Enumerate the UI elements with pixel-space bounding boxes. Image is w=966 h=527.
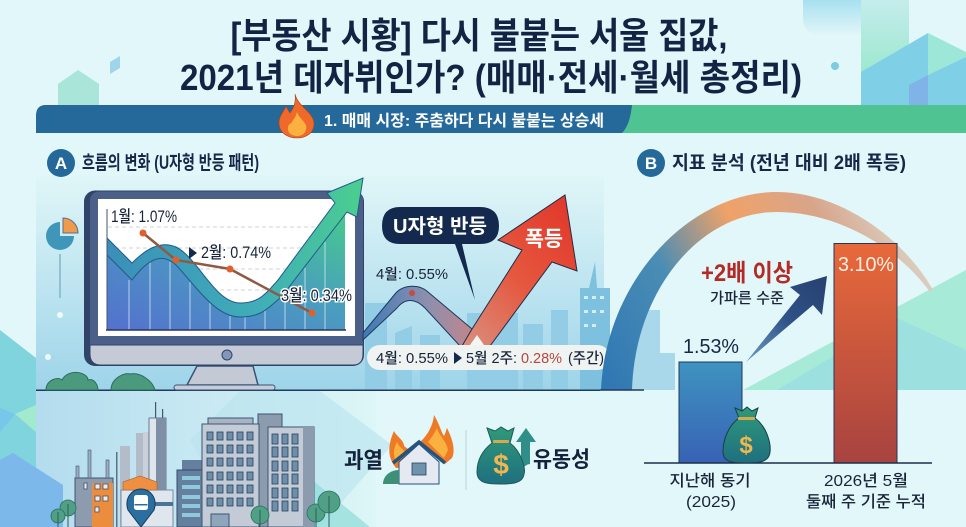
arrow: growth (746, 276, 827, 362)
section banner: 1. 매매 시장: 주춤하다 다시 불붙는 상승세 (324, 112, 604, 130)
middle band scenery (0, 175, 966, 391)
lower left background (0, 391, 36, 527)
title: 2021년 데자뷔인가? (매매·전세·월세 총정리) (180, 57, 802, 98)
callout: double: +2배 이상 (701, 260, 793, 287)
section banner (36, 94, 966, 138)
label and icon: overheating: 과열 (344, 448, 383, 473)
bar: 2025 (679, 362, 742, 463)
weekly pill: 5월 2주: (466, 350, 517, 367)
icon: money bag on bar (723, 407, 770, 463)
label: April: 4월: 0.55% (376, 266, 448, 283)
label: January: 1월: 1.07% (111, 207, 177, 226)
heading B: B (645, 154, 657, 173)
heading B: 지표 분석 (전년 대비 2배 폭등) (672, 152, 906, 174)
city illustration (51, 402, 340, 527)
value: 1.53%: 1.53% (683, 336, 739, 358)
label: March: 3월: 0.34% (281, 286, 352, 305)
weekly pill (367, 335, 610, 370)
trees (46, 372, 155, 390)
heading A: 흐름의 변화 (U자형 반등 패턴) (82, 152, 259, 174)
label: last year: (2025) (686, 494, 736, 511)
icon: money bag with up arrow: $ (493, 449, 509, 480)
label: this year: 둘째 주 기준 누적 (806, 493, 926, 511)
icon: fire (279, 94, 314, 138)
heading A: A (55, 154, 67, 173)
chart: bar comparison (600, 244, 932, 511)
label: this year (806, 472, 926, 511)
title: [부동산 시황] 다시 불붙는 서울 집값, (230, 15, 728, 56)
icon: pie chart (45, 218, 78, 360)
label: last year (670, 472, 750, 511)
value: 3.10%: 3.10% (838, 254, 894, 276)
monitor (84, 178, 364, 390)
heading A (47, 149, 259, 177)
label: surge: 폭등 (525, 228, 563, 251)
label: last year: 지난해 동기 (670, 472, 750, 490)
weekly pill: 0.28% (521, 350, 562, 367)
screen (98, 199, 355, 336)
weekly pill: (주간) (568, 350, 604, 367)
weekly pill: 4월: 0.55% (376, 350, 448, 367)
title (180, 15, 802, 98)
icon: money bag on bar: $ (739, 432, 753, 459)
arch (601, 192, 933, 390)
label: February: 2월: 0.74% (201, 243, 271, 262)
arrow: surge (462, 195, 577, 346)
bar: 2026 (834, 244, 897, 463)
heading B (637, 149, 906, 177)
chart: rebound wave (363, 286, 490, 346)
label and icon: overheating (344, 415, 454, 484)
icon: money bag with up arrow (466, 427, 590, 490)
label: this year: 2026년 5월 (824, 472, 908, 490)
callout: double: 가파른 수준 (710, 290, 784, 307)
callout: U rebound: U자형 반등 (393, 215, 487, 238)
callout: double (701, 260, 793, 307)
callout: U rebound (382, 207, 499, 300)
chart: U-shaped line (106, 178, 363, 330)
icon: money bag with up arrow: 유동성 (533, 447, 590, 472)
